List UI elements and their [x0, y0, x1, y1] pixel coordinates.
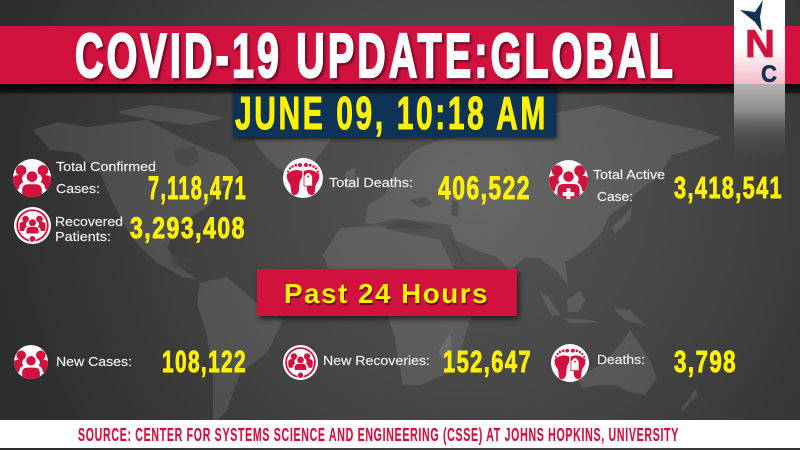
stat: deaths [551, 344, 737, 382]
date box [233, 84, 556, 139]
stat: new recoveries: 152,647 [443, 344, 532, 379]
stat: total active case [548, 160, 783, 205]
stat: recovered patients [14, 207, 246, 245]
stat: total active case: Total Active [593, 168, 665, 182]
source footer [0, 420, 800, 448]
stat: new recoveries [283, 344, 532, 380]
band shadow [0, 84, 800, 95]
stat: new cases [13, 344, 247, 380]
stat: deaths: Deaths: [597, 353, 645, 367]
inland seas [170, 147, 468, 272]
stat: new recoveries: New Recoveries: [323, 354, 430, 368]
stat: recovered patients: Patients: [55, 230, 111, 244]
stat: new cases: 108,122 [162, 344, 247, 379]
stat: total confirmed cases: 7,118,471 [148, 170, 247, 206]
date box: JUNE 09, 10:18 AM [235, 87, 548, 139]
stat: total active case: Case: [597, 190, 633, 204]
stat: deaths: 3,798 [674, 344, 737, 379]
past 24 hours banner [257, 269, 517, 316]
world map [33, 105, 722, 425]
stat: total deaths: 406,522 [438, 170, 531, 206]
past 24 hours banner: Past 24 Hours [284, 278, 489, 309]
stat: total confirmed cases: Cases: [56, 182, 100, 196]
stat: new cases: New Cases: [56, 355, 132, 369]
logo: NC: C [761, 61, 777, 88]
stat: total confirmed cases [12, 159, 247, 206]
stat: total deaths: Total Deaths: [329, 176, 413, 190]
logo: NC: N [745, 23, 775, 66]
stat: recovered patients: Recovered [55, 215, 123, 229]
stat: total confirmed cases: Total Confirmed [56, 160, 156, 174]
logo: NC [734, 0, 785, 160]
stat: recovered patients: 3,293,408 [130, 212, 246, 245]
red title band [0, 26, 800, 84]
stat: total deaths [283, 158, 531, 206]
